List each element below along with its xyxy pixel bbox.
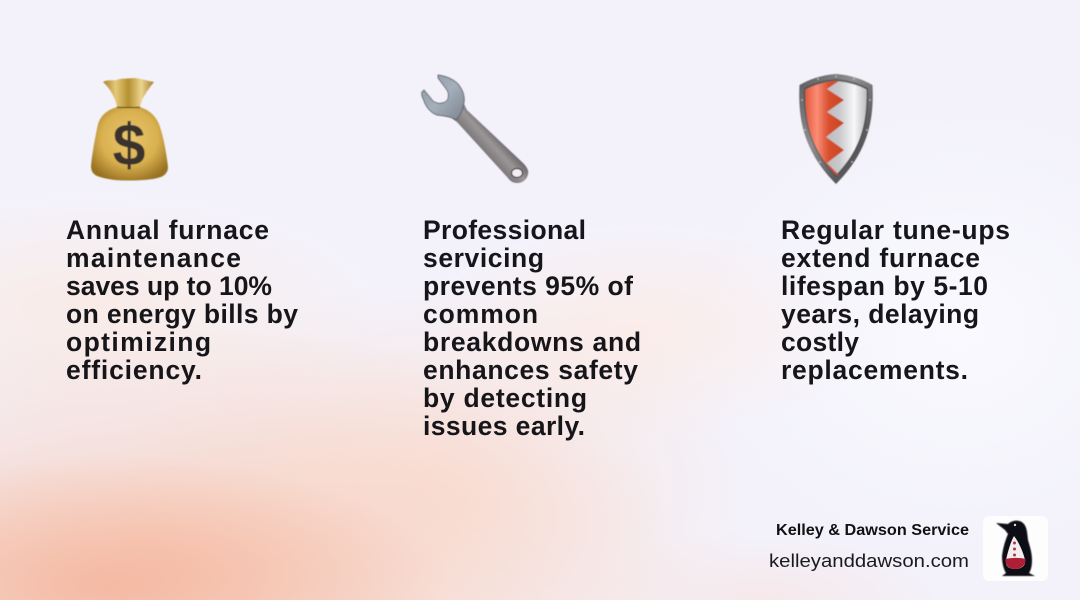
text block: professional servicing: breakdowns and — [423, 327, 641, 357]
brand website: kelleyanddawson.com — [769, 550, 969, 571]
icon: dollar sign: $ — [113, 112, 145, 178]
text block: regular tune-ups: Regular tune-ups — [781, 215, 1010, 245]
text block: professional servicing: Professional — [423, 215, 586, 245]
text block: regular tune-ups — [781, 215, 1010, 385]
text block: professional servicing: prevents 95% of — [423, 271, 633, 301]
text block: annual maintenance savings: optimizing — [66, 327, 211, 357]
text block: regular tune-ups: lifespan by 5-10 — [781, 271, 988, 301]
text block: regular tune-ups: extend furnace — [781, 243, 980, 273]
text block: annual maintenance savings: maintenance — [66, 243, 241, 273]
text block: regular tune-ups: replacements. — [781, 355, 968, 385]
icon: money bag — [91, 78, 168, 180]
text block: regular tune-ups: years, delaying — [781, 299, 979, 329]
text block: regular tune-ups: costly — [781, 327, 859, 357]
text block: annual maintenance savings: efficiency. — [66, 355, 202, 385]
text block: annual maintenance savings: Annual furnace — [66, 215, 269, 245]
text block: professional servicing: by detecting — [423, 383, 587, 413]
text block: professional servicing: common — [423, 299, 538, 329]
text block: professional servicing: issues early. — [423, 411, 585, 441]
text block: professional servicing: servicing — [423, 243, 544, 273]
icon: shield — [799, 74, 873, 184]
brand name: Kelley & Dawson Service — [776, 522, 969, 539]
logo: penguin — [983, 516, 1048, 581]
icon: wrench — [422, 75, 528, 183]
text block: professional servicing — [423, 215, 641, 441]
text block: annual maintenance savings — [66, 215, 298, 385]
text block: annual maintenance savings: saves up to 10% — [66, 271, 272, 301]
text block: professional servicing: enhances safety — [423, 355, 638, 385]
text block: annual maintenance savings: on energy bills by — [66, 299, 298, 329]
